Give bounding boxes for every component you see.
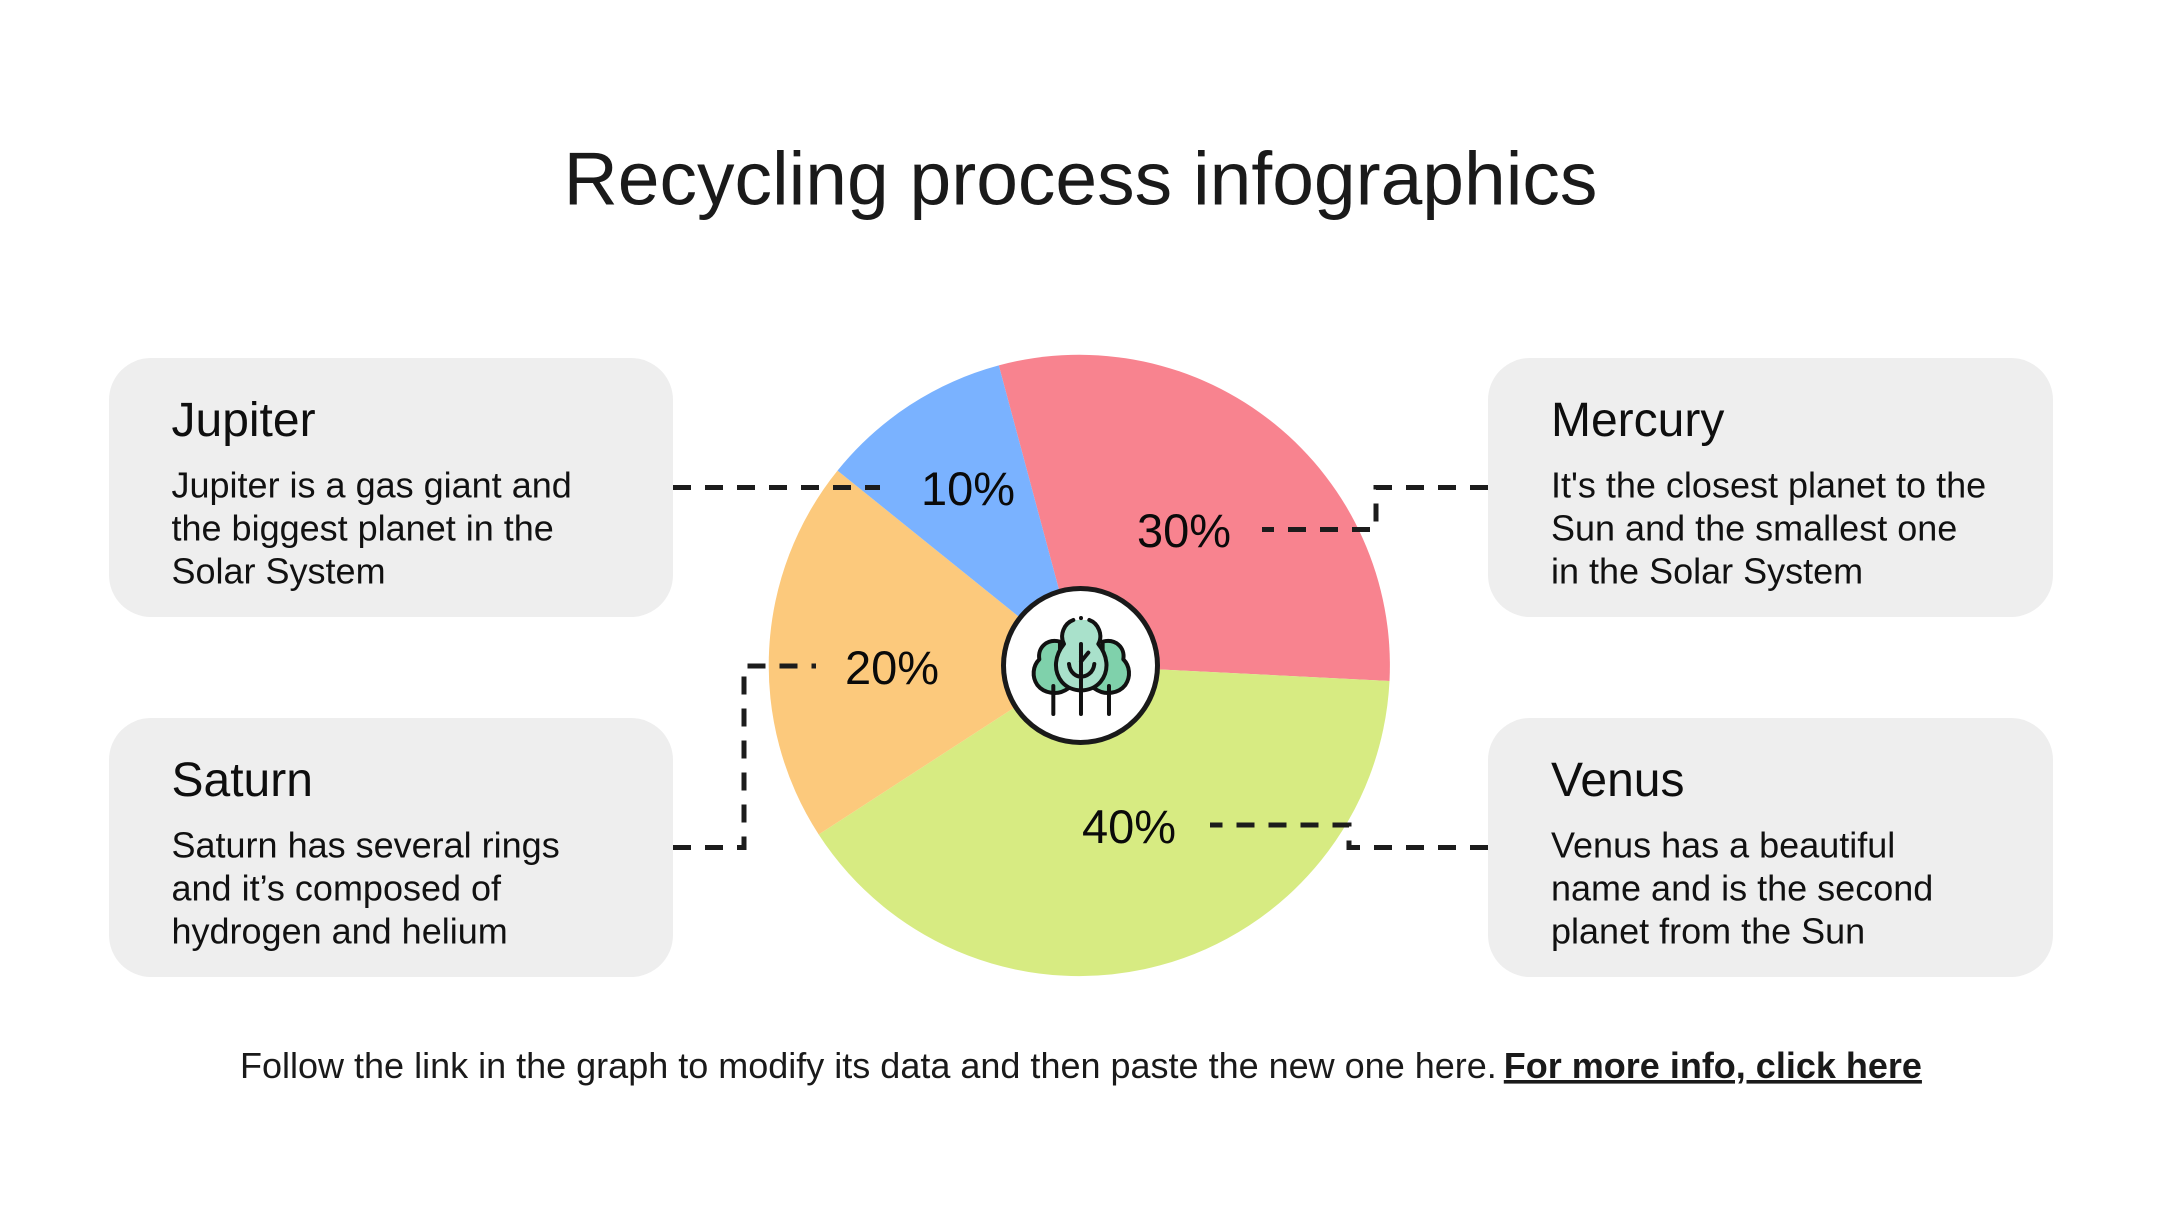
panel: Venus bbox=[1488, 718, 2053, 977]
label: 10%: 10% bbox=[921, 462, 1015, 515]
icon: trees in circle bbox=[1004, 588, 1158, 742]
slice: Jupiter 10% bbox=[838, 365, 1079, 665]
connector: Jupiter bbox=[673, 485, 880, 490]
text: Jupiter description: the biggest planet in the bbox=[172, 508, 554, 548]
text: Saturn description: Saturn has several rings bbox=[172, 824, 560, 866]
text: Venus description: planet from the Sun bbox=[1551, 910, 1865, 952]
heading: Saturn: Saturn bbox=[172, 754, 313, 807]
label: 30%: 30% bbox=[1137, 504, 1231, 557]
heading: Mercury: Mercury bbox=[1551, 394, 1724, 447]
text: Venus description: Venus has a beautiful bbox=[1551, 824, 1895, 866]
text: Saturn description: and it’s composed of bbox=[172, 868, 502, 908]
text: Mercury description: Sun and the smallest one bbox=[1551, 508, 1957, 548]
heading: Venus: Venus bbox=[1551, 754, 1684, 807]
slice: Venus 40% bbox=[819, 665, 1390, 976]
label: 40%: 40% bbox=[1082, 800, 1176, 853]
panel: Saturn bbox=[109, 718, 673, 977]
footer note: Follow the link in the graph to modify its data and then paste the new one here. For more info, click here bbox=[240, 1045, 1922, 1086]
connector: Saturn bbox=[673, 666, 816, 848]
text: Mercury description: in the Solar System bbox=[1551, 550, 1863, 592]
text: Mercury description: It's the closest planet to the bbox=[1551, 464, 1986, 506]
text: Jupiter description: Jupiter is a gas giant and bbox=[172, 464, 572, 506]
panel: Mercury bbox=[1488, 358, 2053, 617]
label: 20%: 20% bbox=[845, 641, 939, 694]
text: Jupiter description: Solar System bbox=[172, 550, 386, 592]
heading: Jupiter: Jupiter bbox=[172, 394, 316, 447]
connector: Mercury bbox=[1262, 488, 1488, 530]
connector: Venus bbox=[1210, 825, 1488, 848]
slice: Saturn 20% bbox=[769, 471, 1079, 834]
panel: Jupiter bbox=[109, 358, 673, 617]
pie chart bbox=[769, 355, 1390, 976]
title: Recycling process infographics bbox=[564, 136, 1597, 220]
text: Saturn description: hydrogen and helium bbox=[172, 910, 508, 952]
slice: Mercury 30% bbox=[999, 355, 1390, 681]
text: Venus description: name and is the second bbox=[1551, 868, 1933, 908]
